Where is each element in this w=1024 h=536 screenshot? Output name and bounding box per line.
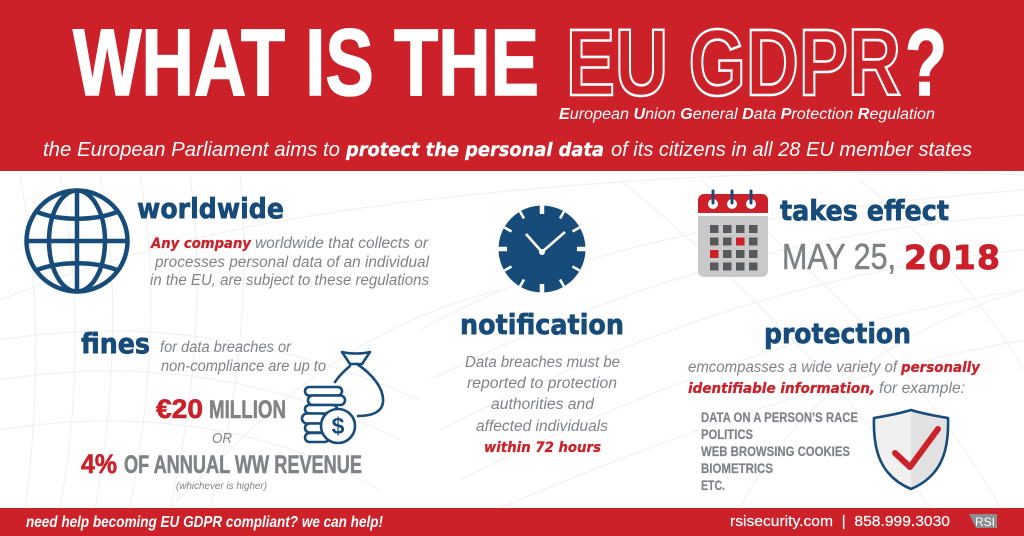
fine amount: 20 million: MILLION	[209, 396, 286, 424]
icon: calendar	[698, 191, 768, 277]
list of data examples: POLITICS	[701, 427, 753, 442]
date: MAY 25,	[782, 236, 896, 277]
text block: fines intro: non-compliance are up to	[161, 358, 326, 375]
title: ?	[905, 10, 947, 116]
panel: fines	[81, 327, 383, 492]
text block: fines intro	[160, 339, 326, 375]
header banner	[0, 0, 1024, 171]
heading: worldwide: worldwide	[137, 192, 284, 225]
text block: worldwide body: worldwide that collects or	[255, 235, 429, 252]
text block: notification body: Data breaches must be	[465, 354, 620, 371]
footnote: (whichever is higher)	[176, 481, 267, 492]
heading: takes effect: takes effect	[780, 194, 949, 227]
fine amount: 4 percent: 4%	[81, 449, 117, 479]
fine amount: 20 million	[156, 394, 286, 424]
title: WHAT IS THE	[73, 10, 539, 116]
title	[73, 10, 947, 116]
footer call to action: need help becoming EU GDPR compliant? we can help!	[26, 514, 383, 531]
logo: RSI	[969, 514, 997, 529]
text block: worldwide body: Any company	[150, 236, 252, 252]
heading: fines: fines	[81, 327, 150, 360]
text block: worldwide body	[150, 235, 430, 289]
text block: notification body: affected individuals	[476, 418, 608, 435]
heading: notification: notification	[460, 308, 624, 341]
tagline: protect the personal data	[345, 139, 604, 161]
tagline	[43, 139, 972, 161]
text block: worldwide body: in the EU, are subject to these regulations	[150, 272, 429, 289]
panel: worldwide	[26, 190, 430, 292]
text block: notification body: authorities and	[491, 396, 595, 413]
list of data examples: DATA ON A PERSON’S RACE	[701, 410, 858, 425]
text block: protection intro: for example:	[879, 380, 965, 397]
icon: money bag and coins: $	[332, 413, 345, 439]
footer contact details: rsisecurity.com | 858.999.3030	[730, 513, 950, 530]
subtitle: acronym expansion: European Union General Data Protection Regulation	[559, 106, 935, 123]
title: EU GDPR	[566, 10, 901, 116]
list of data examples: ETC.	[701, 478, 725, 493]
icon: shield with check mark	[874, 410, 948, 489]
footer bar	[0, 508, 1024, 536]
date	[782, 236, 1000, 277]
panel: takes effect	[698, 191, 1000, 277]
icon: clock	[498, 206, 586, 292]
text block: notification body: reported to protection	[467, 375, 617, 392]
text block: protection intro	[688, 359, 981, 397]
fine amount: 20 million: €20	[156, 394, 203, 424]
logo: RSI: RSI	[975, 515, 995, 529]
text block: worldwide body: processes personal data of an individual	[154, 254, 430, 271]
date: 2018	[904, 238, 1000, 277]
list of data examples: BIOMETRICS	[701, 461, 773, 476]
panel: notification	[460, 206, 624, 456]
icon: money bag and coins	[302, 352, 383, 443]
text: or: OR	[212, 430, 232, 447]
text block: fines intro: for data breaches or	[160, 339, 292, 356]
heading: protection: protection	[764, 317, 911, 350]
text block: notification body	[465, 354, 620, 456]
text block: protection intro: personally	[900, 360, 981, 376]
list of data examples	[701, 410, 858, 493]
text block: protection intro: identifiable information,	[688, 381, 875, 397]
tagline: of its citizens in all 28 EU member states	[611, 139, 972, 161]
text block: notification body: within 72 hours	[484, 440, 601, 456]
panel: protection	[688, 317, 981, 493]
fine amount: 4 percent	[81, 449, 362, 479]
fine amount: 4 percent: OF ANNUAL WW REVENUE	[124, 451, 362, 479]
icon: globe	[26, 190, 128, 292]
text block: protection intro: emcompasses a wide variety of	[688, 359, 899, 376]
tagline: the European Parliament aims to	[43, 139, 340, 161]
list of data examples: WEB BROWSING COOKIES	[701, 444, 850, 459]
